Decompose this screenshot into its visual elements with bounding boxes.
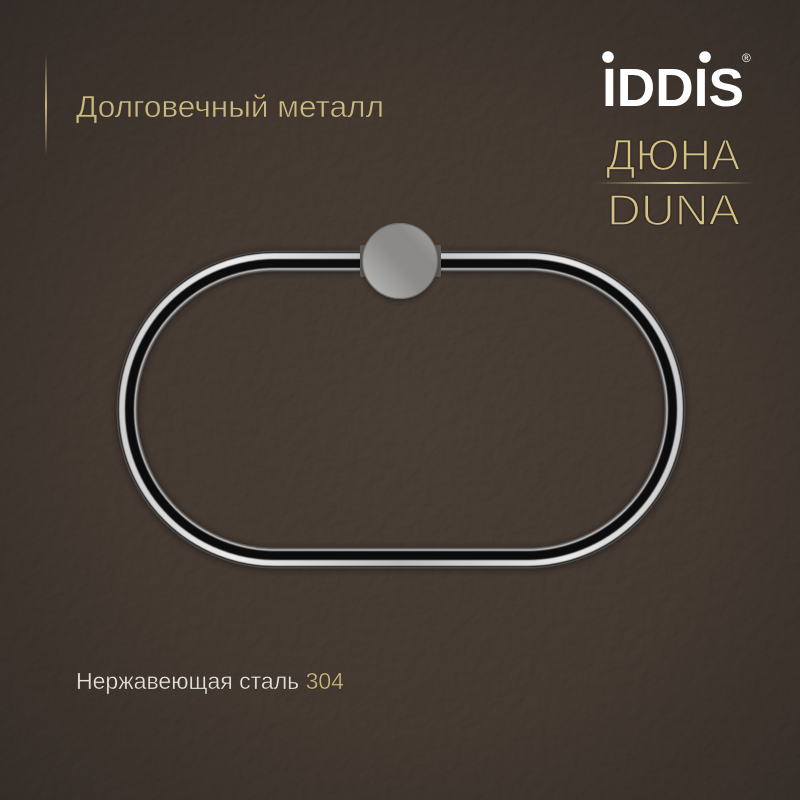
heading: durable metal: Долговечный металл <box>76 89 384 124</box>
accent vertical line <box>45 54 47 156</box>
collection name: cyrillic: ДЮНА <box>606 131 741 180</box>
wall mount knob <box>360 224 441 302</box>
collection name: latin: DUNA <box>607 186 741 235</box>
caption: stainless steel 304: Нержавеющая сталь 304 <box>76 668 344 694</box>
chrome tube <box>122 256 680 563</box>
product: towel ring <box>122 224 680 563</box>
logo: iddis: ® <box>742 51 751 65</box>
gold divider <box>596 182 754 184</box>
ring shadow <box>127 262 675 559</box>
logo: iddis: IDDIS <box>602 58 744 118</box>
